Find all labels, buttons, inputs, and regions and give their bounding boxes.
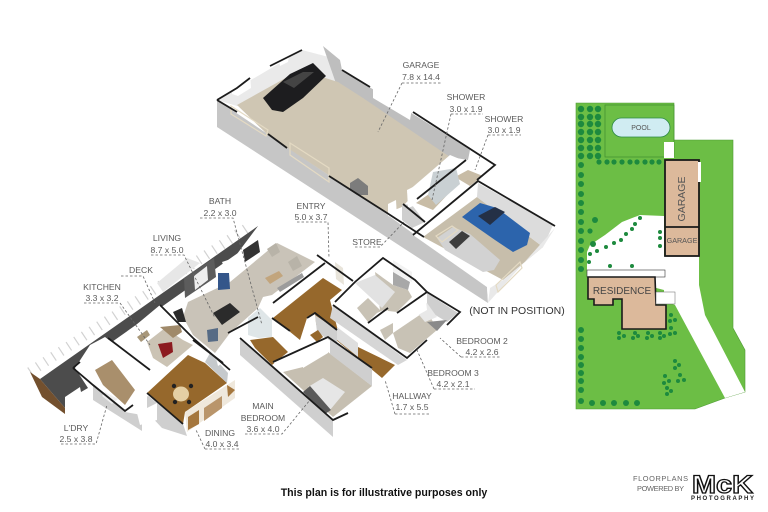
garage building plan: GARAGE — [676, 177, 688, 221]
label: kitchen: 3.3 x 3.2 — [86, 293, 119, 303]
showers and store — [388, 155, 483, 228]
main bedroom — [273, 337, 372, 417]
shower glass — [248, 308, 272, 338]
label: shower 1: SHOWER — [447, 92, 485, 102]
garage building plan: GARAGE — [667, 236, 698, 245]
label: bath: BATH — [209, 196, 231, 206]
room labels — [60, 60, 523, 449]
bedrooms block — [333, 258, 460, 358]
garage building plan — [665, 160, 701, 256]
detached garage building — [217, 46, 557, 303]
label: bedroom 3: 4.2 x 2.1 — [437, 379, 470, 389]
hall bedroom band — [330, 305, 407, 365]
deck bench — [157, 258, 200, 292]
pool: POOL — [631, 125, 651, 132]
driveway — [664, 142, 674, 158]
carport bay — [413, 182, 557, 303]
garage doors — [231, 50, 412, 120]
deck rail — [30, 226, 250, 372]
living floor — [183, 243, 315, 353]
l'dry rooms — [75, 337, 153, 405]
car: silver — [436, 226, 500, 272]
living furniture — [173, 222, 317, 342]
bath wall — [275, 320, 290, 350]
hallway floor — [273, 278, 395, 378]
kitchen — [130, 305, 195, 387]
label: living: LIVING — [153, 233, 181, 243]
label: store: STORE — [352, 237, 382, 247]
label: hallway: HALLWAY — [392, 391, 432, 401]
label: main bedroom — [241, 400, 310, 434]
label: bedroom 3: BEDROOM 3 — [427, 368, 479, 378]
hallway wall — [273, 265, 325, 317]
label: kitchen: KITCHEN — [83, 282, 121, 292]
label: shower 1: 3.0 x 1.9 — [450, 104, 483, 114]
porch — [137, 403, 157, 425]
disclaimer: This plan is for illustrative purposes only — [281, 487, 487, 499]
label: l'dry: 2.5 x 3.8 — [60, 434, 93, 444]
label: entry: ENTRY — [297, 201, 326, 211]
car: blue — [462, 203, 530, 252]
note: not in position: (NOT IN POSITION) — [469, 305, 565, 317]
label: l'dry: L'DRY — [64, 423, 88, 433]
label: dining: 4.0 x 3.4 — [206, 439, 239, 449]
outer window wall — [333, 342, 430, 437]
white wall end — [65, 387, 82, 415]
bath floor — [250, 337, 288, 365]
label: dining: DINING — [205, 428, 235, 438]
label: shower 2: 3.0 x 1.9 — [488, 125, 521, 135]
label: shower 2 — [475, 114, 523, 170]
pool enclosure — [605, 105, 674, 157]
label: dining — [196, 428, 240, 449]
label: garage: 7.8 x 14.4 — [402, 72, 440, 82]
walls — [73, 255, 460, 424]
residence — [588, 277, 666, 329]
dining wall and window — [172, 353, 235, 432]
pool — [612, 118, 670, 137]
garage outer wall face — [217, 100, 488, 303]
deck end timber — [30, 372, 65, 414]
living door bay — [215, 342, 238, 366]
label: main bedroom: 3.6 x 4.0 — [247, 424, 280, 434]
outer wall: dining — [147, 395, 187, 436]
label: entry: 5.0 x 3.7 — [295, 212, 328, 222]
label: garage — [378, 60, 441, 132]
car: black SUV — [263, 63, 326, 112]
label: garage: GARAGE — [403, 60, 440, 70]
lawn — [576, 103, 745, 409]
label: bedroom 2: BEDROOM 2 — [456, 336, 508, 346]
label: bedroom 2 — [440, 336, 508, 357]
logo: POWERED BY — [637, 484, 684, 493]
label: deck: DECK — [129, 265, 153, 275]
garage floor — [237, 70, 450, 213]
label: bath: 2.2 x 3.0 — [204, 208, 237, 218]
toilet room — [307, 313, 337, 345]
label: l'dry — [60, 405, 107, 444]
logo: McK — [692, 471, 753, 499]
label: deck — [121, 265, 155, 303]
logo: PHOTOGRAPHY — [691, 496, 754, 502]
label: bath — [200, 196, 262, 325]
label: hallway: 1.7 x 5.5 — [396, 402, 429, 412]
outer wall: l'dry — [93, 385, 142, 431]
entry door — [335, 262, 344, 285]
label: shower 2: SHOWER — [485, 114, 523, 124]
main house — [30, 222, 460, 437]
porch — [656, 292, 675, 304]
label: shower 1 — [432, 92, 485, 200]
label: living — [151, 233, 215, 318]
residence: RESIDENCE — [593, 286, 651, 297]
dining floor — [147, 355, 227, 424]
label: entry — [295, 201, 329, 258]
label: kitchen — [83, 282, 150, 345]
label: store — [352, 222, 404, 247]
label: main bedroom: MAIN — [252, 401, 274, 411]
label: bedroom 3 — [417, 350, 479, 389]
outer wall: main bedroom — [240, 338, 333, 437]
label: hallway — [385, 380, 432, 414]
label: bedroom 2: 4.2 x 2.6 — [466, 347, 499, 357]
garage back walls — [217, 50, 340, 106]
logo: FLOORPLANS — [633, 474, 688, 483]
deck strip — [587, 270, 665, 277]
label: main bedroom: BEDROOM — [241, 413, 285, 423]
deck floor — [40, 226, 262, 408]
site plan — [576, 103, 745, 409]
trees — [578, 106, 686, 406]
lower hall panel — [337, 327, 358, 357]
logo — [633, 471, 754, 502]
label: living: 8.7 x 5.0 — [151, 245, 184, 255]
